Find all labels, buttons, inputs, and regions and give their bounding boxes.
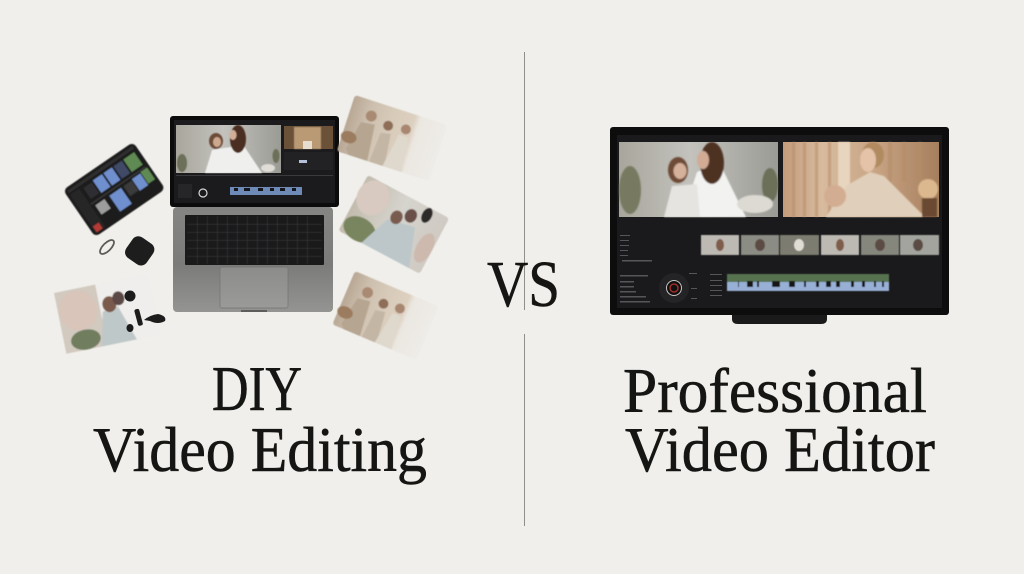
heading: Video Editing: Video Editing — [93, 415, 427, 485]
laptop base — [173, 207, 333, 312]
label: VS: VS — [487, 248, 560, 321]
heading: DIY: DIY — [212, 354, 302, 424]
photo: bride with flowers and gear — [54, 274, 165, 354]
icon: control dial — [659, 273, 689, 303]
chart: editing timeline — [727, 274, 889, 291]
monitor frame — [610, 127, 949, 315]
photo: trio, top right — [336, 95, 447, 181]
icon: black pouch — [122, 233, 157, 268]
icon: cable loop — [98, 238, 116, 256]
laptop screen — [170, 116, 339, 207]
heading: Professional: Professional — [623, 356, 927, 426]
icon: laptop with editing software — [170, 116, 339, 312]
panel: side lists — [620, 235, 722, 302]
video: woman by curtains — [783, 142, 939, 217]
divider: lower — [524, 334, 525, 526]
divider: upper — [524, 52, 525, 310]
icon: tablet with editing app — [63, 142, 165, 237]
panel: thumbnail strip — [701, 235, 939, 255]
photo: trio, bottom right — [331, 271, 439, 360]
video: two brides — [619, 142, 778, 217]
photo: bridal party with flowers — [337, 175, 449, 275]
icon: professional monitor — [610, 127, 949, 324]
monitor stand — [732, 314, 827, 324]
heading: Video Editor: Video Editor — [625, 415, 935, 485]
